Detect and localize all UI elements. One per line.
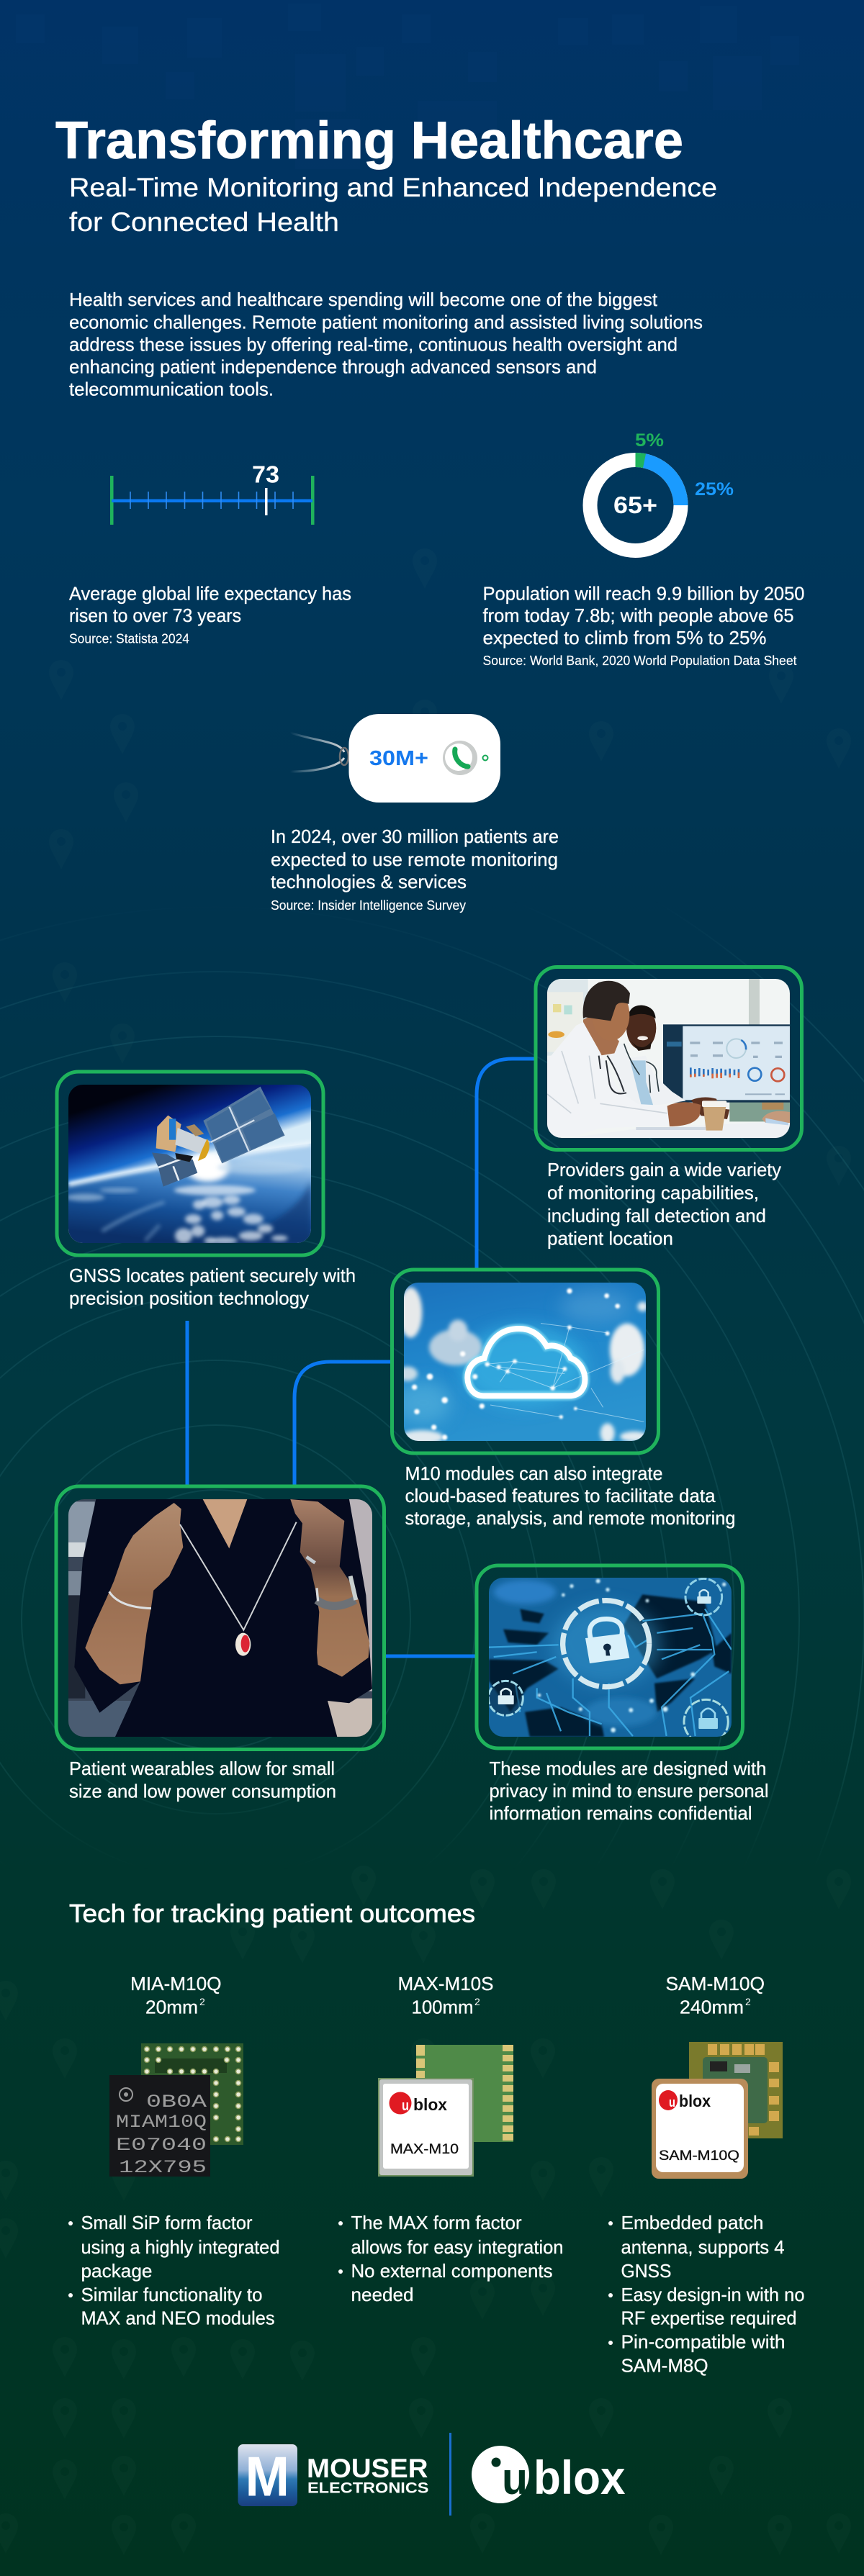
panel: satellite photo <box>57 1072 323 1255</box>
cloud caption: cloud-based features to facilitate data <box>405 1485 716 1506</box>
providers caption: of monitoring capabilities, <box>547 1182 759 1203</box>
chip: MAX-M10S: blox <box>413 2095 447 2114</box>
life expectancy text <box>69 583 351 646</box>
faint map pins <box>0 548 851 2555</box>
remote monitoring text: expected to use remote monitoring <box>271 849 558 870</box>
bullets SAM: Pin-compatible with <box>621 2331 785 2352</box>
divider <box>449 2433 451 2516</box>
column heading MIA: MIA-M10Q <box>130 1973 222 1994</box>
column heading MIA: 20mm <box>145 1997 198 2018</box>
column: MAX-M10S <box>338 1973 563 2305</box>
bullets MIA: Similar functionality to <box>81 2284 262 2305</box>
bullets MAX <box>338 2212 563 2305</box>
chip: SAM-M10Q: u <box>669 2095 675 2110</box>
wearable device 30M+: 30M+ <box>369 747 428 770</box>
subtitle <box>69 173 717 237</box>
population text: expected to climb from 5% to 25% <box>482 627 766 648</box>
logo: u-blox: blox <box>534 2451 626 2504</box>
column heading MAX: 100mm <box>412 1997 474 2018</box>
panel: providers photo <box>536 967 802 1150</box>
chip: MIA-M10Q: 0B0A <box>146 2092 207 2112</box>
bullets MIA <box>68 2212 279 2329</box>
chip: MAX-M10S: u <box>402 2098 409 2114</box>
logo: Mouser Electronics: ELECTRONICS <box>307 2480 429 2496</box>
remote monitoring text: technologies & services <box>271 871 467 892</box>
column heading MAX: MAX-M10S <box>397 1973 494 1994</box>
cloud caption <box>405 1463 736 1529</box>
remote monitoring text <box>271 826 559 913</box>
security caption: information remains confidential <box>490 1802 752 1824</box>
satellite caption: precision position technology <box>69 1287 309 1309</box>
bullets MIA: using a highly integrated <box>81 2236 279 2258</box>
providers caption: patient location <box>547 1228 673 1249</box>
donut chart 65+: 25% <box>695 479 734 500</box>
cloud caption: M10 modules can also integrate <box>405 1463 662 1484</box>
bullets MIA: MAX and NEO modules <box>81 2308 275 2329</box>
providers caption: Providers gain a wide variety <box>547 1159 781 1180</box>
security caption: These modules are designed with <box>490 1758 766 1779</box>
panel: wearable photo <box>56 1486 384 1749</box>
providers caption <box>547 1159 781 1249</box>
security caption <box>490 1758 769 1824</box>
wearable caption: size and low power consumption <box>69 1781 336 1802</box>
logo: u-blox: u <box>502 2454 528 2504</box>
donut chart 65+: 5% <box>635 430 664 451</box>
column heading MIA <box>130 1973 222 2018</box>
chip: SAM-M10Q: SAM-M10Q <box>659 2148 739 2164</box>
bullets MIA: package <box>81 2260 153 2282</box>
security caption: privacy in mind to ensure personal <box>490 1780 769 1802</box>
life expectancy text: Source: Statista 2024 <box>69 632 189 646</box>
intro text block: enhancing patient independence through advanced sensors and <box>69 356 597 377</box>
wearable device 30M+ <box>290 714 500 803</box>
population text <box>482 583 805 668</box>
chip: MIA-M10Q: 12X795 <box>119 2157 207 2178</box>
population text: Population will reach 9.9 billion by 2050 <box>482 583 805 605</box>
donut chart 65+ <box>590 430 734 551</box>
remote monitoring text: In 2024, over 30 million patients are <box>271 826 559 847</box>
bullets MIA: Small SiP form factor <box>81 2212 253 2233</box>
column heading SAM: SAM-M10Q <box>665 1973 765 1994</box>
chip: MIA-M10Q <box>109 2043 243 2178</box>
faint concentric signal rings <box>0 969 864 1811</box>
bullets SAM: SAM-M8Q <box>621 2355 708 2377</box>
population text: from today 7.8b; with people above 65 <box>482 605 793 626</box>
column: SAM-M10Q <box>608 1973 805 2377</box>
column heading MAX: 2 <box>474 1996 480 2007</box>
column heading MIA: 2 <box>199 1996 205 2007</box>
intro text block <box>69 289 703 400</box>
bullets SAM: Embedded patch <box>621 2212 763 2233</box>
bullets MAX: No external components <box>351 2260 553 2282</box>
remote monitoring text: Source: Insider Intelligence Survey <box>271 898 466 913</box>
panel: security photo <box>477 1565 743 1748</box>
bullets MAX: needed <box>351 2284 413 2305</box>
chip: MAX-M10S <box>378 2045 513 2177</box>
life expectancy text: Average global life expectancy has <box>69 583 351 605</box>
satellite caption <box>69 1265 356 1309</box>
intro text block: address these issues by offering real-time, continuous health oversight and <box>69 334 678 356</box>
logo: Mouser Electronics: M <box>245 2444 289 2508</box>
bullets SAM: RF expertise required <box>621 2308 796 2329</box>
subtitle: Real-Time Monitoring and Enhanced Independence <box>69 173 717 202</box>
wearable caption: Patient wearables allow for small <box>69 1758 335 1779</box>
column heading SAM: 240mm <box>680 1997 744 2018</box>
intro text block: economic challenges. Remote patient monitoring and assisted living solutions <box>69 311 703 333</box>
intro text block: Health services and healthcare spending will become one of the biggest <box>69 289 658 310</box>
chip: MIA-M10Q: MIAM10Q <box>116 2112 207 2133</box>
column: MIA-M10Q <box>68 1973 279 2329</box>
logo: Mouser Electronics: MOUSER <box>307 2454 428 2483</box>
chip: SAM-M10Q: blox <box>679 2092 711 2110</box>
bullets SAM <box>608 2212 805 2377</box>
column heading SAM <box>665 1973 765 2018</box>
donut chart 65+: 65+ <box>613 492 657 518</box>
chip: MIA-M10Q: E07040 <box>116 2135 207 2156</box>
chip: SAM-M10Q <box>652 2042 783 2179</box>
life expectancy text: risen to over 73 years <box>69 605 241 626</box>
title: Transforming Healthcare <box>55 112 683 170</box>
bullets SAM: antenna, supports 4 <box>621 2236 785 2258</box>
logo: Mouser Electronics <box>238 2444 429 2508</box>
bullets SAM: Easy design-in with no <box>621 2284 805 2305</box>
intro text block: telecommunication tools. <box>69 379 274 400</box>
bullets MAX: allows for easy integration <box>351 2236 563 2258</box>
column heading SAM: 2 <box>745 1996 751 2007</box>
wearable caption <box>69 1758 336 1802</box>
cloud caption: storage, analysis, and remote monitoring <box>405 1507 736 1529</box>
column heading MAX <box>397 1973 494 2018</box>
bullets SAM: GNSS <box>621 2260 671 2282</box>
life expectancy ruler chart: 73 <box>252 461 279 488</box>
providers caption: including fall detection and <box>547 1205 766 1226</box>
logo: u-blox <box>472 2446 626 2504</box>
panel: cloud photo <box>392 1270 658 1453</box>
bullets MAX: The MAX form factor <box>351 2212 522 2233</box>
population text: Source: World Bank, 2020 World Population Data Sheet <box>482 654 796 668</box>
subtitle: for Connected Health <box>69 207 339 237</box>
satellite caption: GNSS locates patient securely with <box>69 1265 356 1286</box>
connectors <box>187 1059 536 1656</box>
section heading: Tech for tracking patient outcomes <box>69 1900 475 1928</box>
life expectancy ruler chart <box>110 461 314 525</box>
chip: MAX-M10S: MAX-M10 <box>390 2142 459 2157</box>
